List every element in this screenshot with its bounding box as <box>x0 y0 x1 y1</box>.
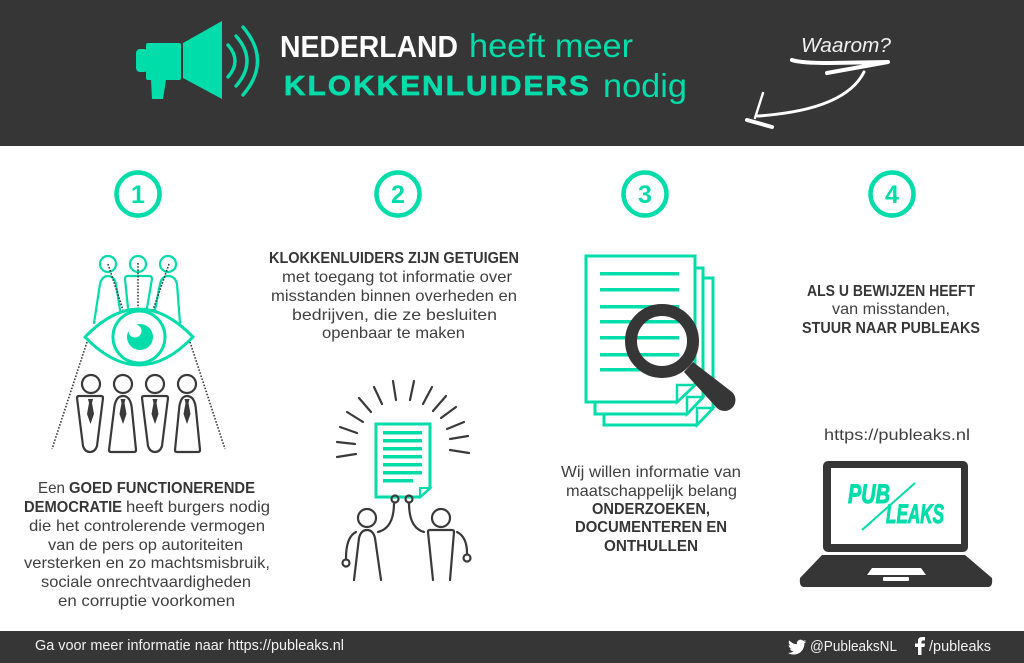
text block: column 4 <box>802 283 980 337</box>
front page <box>586 256 695 402</box>
number badge 4: 4 <box>885 181 899 209</box>
number badge 2 <box>376 172 420 216</box>
text block: column 2: bedrijven, die ze besluiten <box>292 307 497 324</box>
magnifying glass <box>631 310 693 372</box>
text block: column 1: van de pers op autoriteiten <box>48 537 243 554</box>
website link: https://publeaks.nl <box>824 427 970 444</box>
icon: glowing document held by two people <box>337 381 470 580</box>
icon: megaphone <box>136 21 258 99</box>
number badge 3 <box>624 172 666 216</box>
sight lines <box>52 263 225 449</box>
icon: laptop with Publeaks logo <box>800 461 992 587</box>
icon: twitter <box>788 640 806 655</box>
icon: facebook <box>915 637 925 655</box>
text block: column 4: van misstanden, <box>832 301 950 318</box>
callout: Waarom with hand-drawn arrow <box>747 35 892 127</box>
text block: column 2: misstanden binnen overheden en <box>271 288 517 305</box>
icon: eye watching over people <box>52 256 225 452</box>
facebook handle: /publeaks <box>929 638 991 655</box>
number badge 4 <box>870 172 914 216</box>
text block: column 1: GOED FUNCTIONERENDE <box>69 480 255 497</box>
text block: column 2: met toegang tot informatie over <box>282 269 513 286</box>
text block: column 1: DEMOCRATIE <box>24 499 122 516</box>
footer text: Ga voor meer informatie naar https://publeaks.nl <box>35 637 344 654</box>
text block: column 1: versterken en zo machtsmisbruik, <box>24 555 270 572</box>
panel: footer band <box>0 631 1024 663</box>
number badge 1 <box>116 172 160 216</box>
text block: column 3: ONDERZOEKEN, <box>592 501 710 518</box>
text block: column 3 <box>561 464 741 555</box>
panel: header band <box>0 0 1024 146</box>
text block: column 4: ALS U BEWIJZEN HEEFT <box>807 283 975 300</box>
text block: column 2: KLOKKENLUIDERS ZIJN GETUIGEN <box>269 250 519 267</box>
text block: column 2: openbaar te maken <box>322 325 465 342</box>
number badge 3: 3 <box>638 181 652 209</box>
document <box>376 424 430 497</box>
text block: column 3: maatschappelijk belang <box>566 483 737 500</box>
title: NEDERLAND <box>280 29 458 64</box>
text block: column 1: en corruptie voorkomen <box>58 593 235 610</box>
text block: column 1: die het controlerende vermogen <box>29 518 265 535</box>
title: nodig <box>603 67 687 104</box>
two people <box>342 496 470 580</box>
title: KLOKKENLUIDERS <box>284 70 591 101</box>
text block: column 4: STUUR NAAR PUBLEAKS <box>802 320 980 337</box>
number badge 1: 1 <box>131 181 145 209</box>
text block: column 3: DOCUMENTEREN EN <box>575 519 727 536</box>
text block: column 3: ONTHULLEN <box>604 538 698 555</box>
Publeaks logo: PUB <box>848 479 890 509</box>
title <box>280 27 687 104</box>
teal watchers <box>94 256 180 323</box>
light rays <box>337 381 469 457</box>
dark people <box>77 375 200 452</box>
text block: column 1: sociale onrechtvaardigheden <box>41 574 251 591</box>
callout: Waarom with hand-drawn arrow: Waarom? <box>801 35 892 57</box>
twitter handle: @PubleaksNL <box>810 638 897 655</box>
number badge 2: 2 <box>391 181 405 209</box>
text block: column 1 <box>24 480 270 610</box>
Publeaks logo <box>848 479 944 530</box>
text block: column 3: Wij willen informatie van <box>561 464 741 481</box>
text block: column 1: Een <box>38 480 65 497</box>
icon: document stack with magnifying glass <box>586 256 735 425</box>
middle page <box>595 268 703 414</box>
back page <box>604 278 713 425</box>
eye <box>85 309 193 365</box>
title: heeft meer <box>469 27 633 64</box>
Publeaks logo: LEAKS <box>886 499 944 529</box>
text block: column 1: heeft burgers nodig <box>126 499 270 516</box>
text block: column 2 <box>269 250 519 342</box>
